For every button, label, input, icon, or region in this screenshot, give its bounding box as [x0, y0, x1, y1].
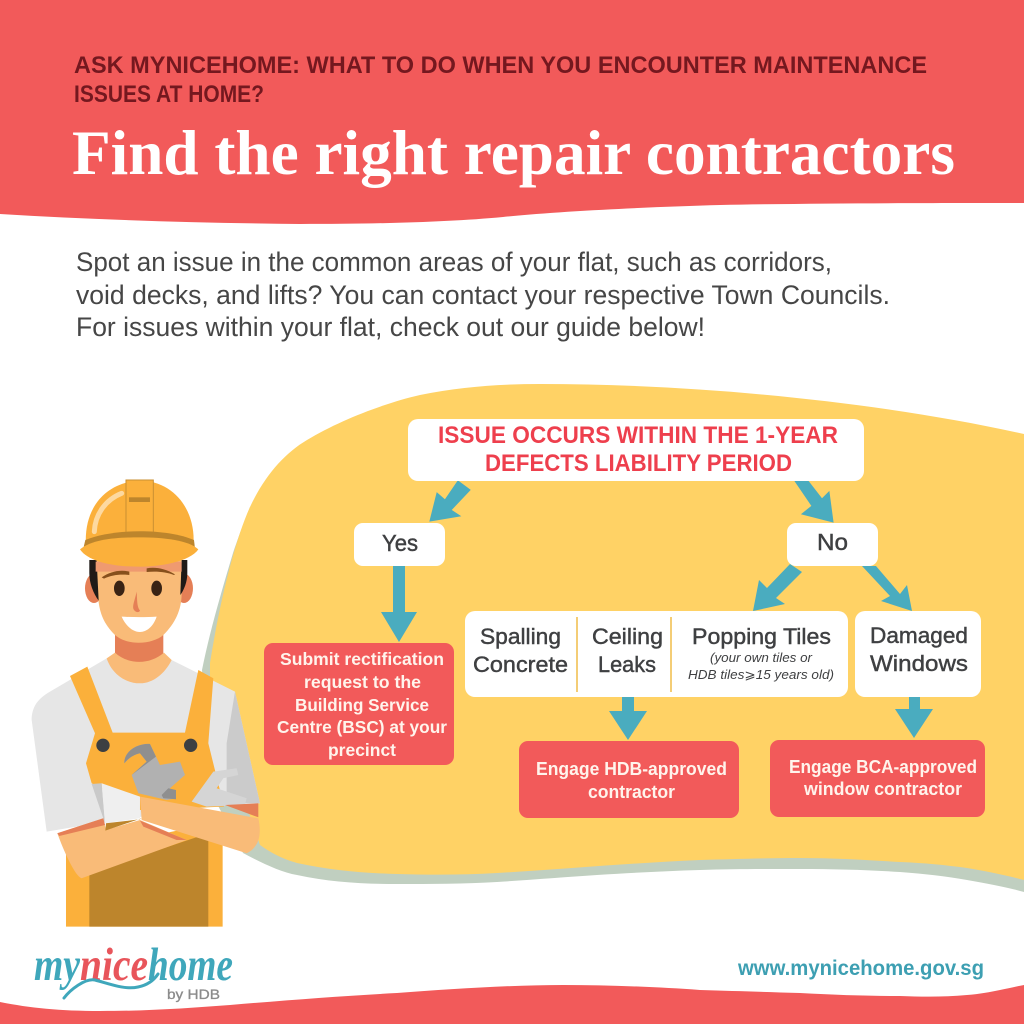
- issues box: Ceiling: [592, 624, 663, 649]
- arrow: No to tiles: [753, 564, 802, 611]
- eyebrow heading: ASK MYNICEHOME: WHAT TO DO WHEN YOU ENCOUNTER MAINTENANCE: [74, 52, 927, 79]
- issues box: HDB tiles⩾15 years old): [688, 667, 834, 682]
- logo: by HDB: [167, 987, 220, 1002]
- logo: my: [34, 939, 80, 991]
- BCA contractor action box: Engage BCA-approved: [789, 757, 977, 777]
- HDB contractor action box: Engage HDB-approved: [536, 759, 727, 779]
- Yes box: [354, 523, 445, 566]
- No box: No: [817, 529, 848, 555]
- BCA contractor action box: [770, 740, 985, 817]
- BSC action box: request to the: [304, 672, 421, 692]
- logo: home: [148, 939, 233, 991]
- worker illustration: [32, 480, 260, 927]
- HDB contractor action box: [519, 741, 739, 818]
- footer wave: [0, 985, 1024, 1024]
- arrow: No to windows: [862, 566, 912, 611]
- Damaged Windows box: Windows: [870, 651, 968, 676]
- website: www.mynicehome.gov.sg: [737, 957, 984, 980]
- logo: nice: [80, 939, 148, 991]
- question box: [408, 419, 864, 481]
- issues box: Concrete: [473, 652, 568, 677]
- gloves: [92, 768, 247, 823]
- Yes box: Yes: [382, 530, 418, 556]
- yellow background blob: [210, 384, 1024, 880]
- eyebrow heading: [74, 52, 927, 108]
- neck: [107, 627, 172, 683]
- intro paragraph: [76, 247, 890, 342]
- eyebrow heading: ISSUES AT HOME?: [74, 81, 264, 108]
- issues box: Spalling: [480, 624, 561, 649]
- question box: ISSUE OCCURS WITHIN THE 1-YEAR: [438, 422, 838, 449]
- BSC action box: Building Service: [295, 695, 429, 715]
- arrow: to HDB contractor: [609, 697, 647, 740]
- shirt: [32, 658, 260, 832]
- wrench: [124, 744, 185, 800]
- HDB contractor action box: contractor: [588, 782, 675, 802]
- BSC action box: Submit rectification: [280, 649, 444, 669]
- arrow: Yes to BSC: [381, 566, 417, 642]
- Damaged Windows box: Damaged: [870, 623, 968, 648]
- arrow: to No: [795, 481, 833, 522]
- head: [85, 560, 193, 643]
- BSC action box: [264, 643, 454, 765]
- flowchart: [264, 419, 985, 818]
- hard hat: [80, 480, 198, 567]
- title: Find the right repair contractors: [72, 118, 955, 188]
- background blob shadow: [202, 507, 1024, 892]
- intro paragraph: void decks, and lifts? You can contact your respective Town Councils.: [76, 280, 890, 310]
- issues box: [465, 611, 848, 697]
- No box: [787, 523, 878, 566]
- arms: [57, 797, 260, 878]
- arrow: to BCA contractor: [895, 697, 933, 738]
- intro paragraph: For issues within your flat, check out our guide below!: [76, 312, 705, 342]
- Damaged Windows box: [855, 611, 981, 697]
- issues box: (your own tiles or: [710, 650, 813, 665]
- issues box: Leaks: [598, 652, 656, 677]
- header banner: [0, 0, 1024, 224]
- BCA contractor action box: window contractor: [803, 779, 962, 799]
- issues box: Popping Tiles: [692, 624, 831, 649]
- BSC action box: precinct: [328, 740, 396, 760]
- overalls: [66, 667, 224, 927]
- logo: [34, 939, 233, 1002]
- question box: DEFECTS LIABILITY PERIOD: [485, 450, 792, 477]
- intro paragraph: Spot an issue in the common areas of your flat, such as corridors,: [76, 247, 832, 277]
- arrow: to Yes: [430, 481, 470, 521]
- BSC action box: Centre (BSC) at your: [277, 717, 447, 737]
